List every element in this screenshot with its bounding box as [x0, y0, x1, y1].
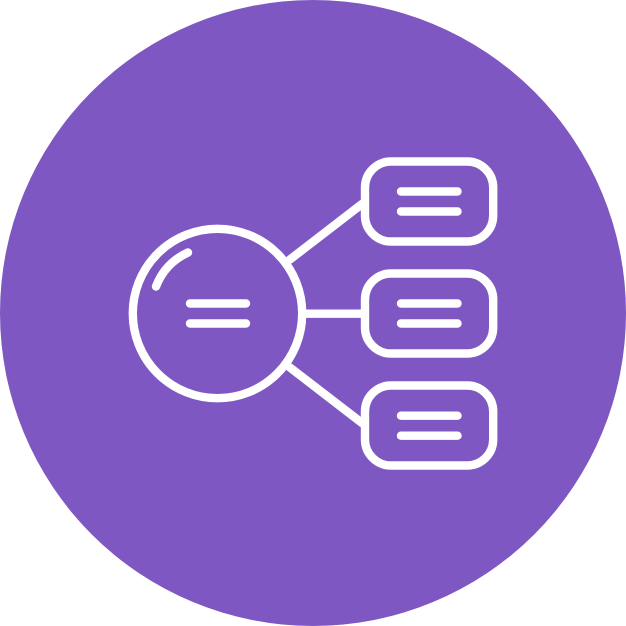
bottom connector: [290, 367, 362, 423]
top connector: [290, 204, 362, 260]
middle connector: [305, 310, 362, 318]
mind map icon: [133, 162, 493, 466]
middle box node: [365, 274, 493, 354]
top box node: [365, 162, 493, 242]
central circle node: [133, 229, 302, 398]
bottom box node: [365, 386, 493, 466]
